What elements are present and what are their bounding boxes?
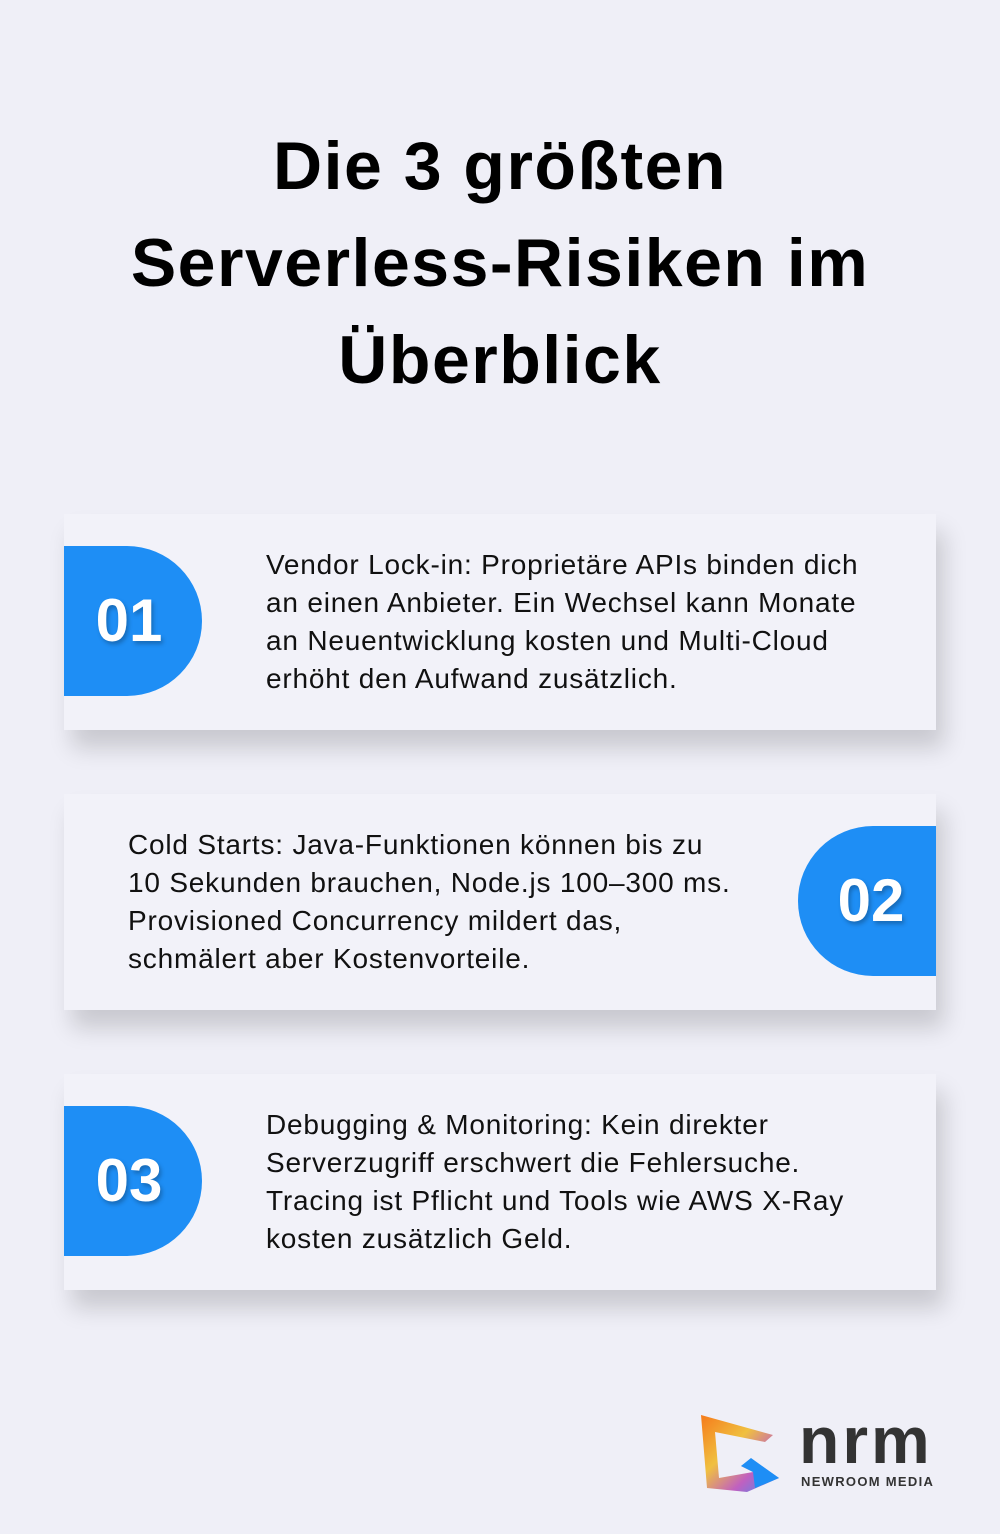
text: cold starts: Cold Starts: Java-Funktionen können bis zu — [128, 829, 703, 860]
text: vendor lock-in: Vendor Lock-in: Proprietäre APIs binden dich — [266, 549, 858, 580]
panel: card 1 — [64, 514, 936, 730]
title: Die 3 größten — [273, 128, 727, 204]
text: cold starts: 10 Sekunden brauchen, Node.js 100–300 ms. — [128, 867, 731, 898]
text: debugging — [266, 1109, 844, 1254]
title: Serverless-Risiken im — [131, 225, 869, 301]
text: vendor lock-in: erhöht den Aufwand zusätzlich. — [266, 663, 678, 694]
text: cold starts: Provisioned Concurrency mildert das, — [128, 905, 622, 936]
text: debugging: Debugging & Monitoring: Kein direkter — [266, 1109, 769, 1140]
panel: card 2 — [64, 794, 936, 1010]
badge 03 — [64, 1106, 202, 1256]
text: vendor lock-in: an einen Anbieter. Ein Wechsel kann Monate — [266, 587, 856, 618]
badge 02 — [798, 826, 936, 976]
logo text: nrm — [799, 1403, 933, 1477]
title: Überblick — [338, 322, 662, 398]
badge 01: 01 — [96, 587, 162, 654]
logo — [701, 1403, 934, 1492]
panel: card 3 — [64, 1074, 936, 1290]
text: cold starts: schmälert aber Kostenvorteile. — [128, 943, 530, 974]
text: debugging: kosten zusätzlich Geld. — [266, 1223, 572, 1254]
text: debugging: Tracing ist Pflicht und Tools wie AWS X-Ray — [266, 1185, 844, 1216]
badge 01 — [64, 546, 202, 696]
icon: logo mark — [701, 1415, 779, 1492]
title — [131, 128, 869, 398]
badge 02: 02 — [838, 867, 904, 934]
text: cold starts — [128, 829, 731, 974]
text: vendor lock-in: an Neuentwicklung kosten und Multi-Cloud — [266, 625, 829, 656]
text: vendor lock-in — [266, 549, 858, 694]
badge 03: 03 — [96, 1147, 162, 1214]
text: debugging: Serverzugriff erschwert die Fehlersuche. — [266, 1147, 800, 1178]
logo: NEWROOM MEDIA — [801, 1474, 934, 1489]
